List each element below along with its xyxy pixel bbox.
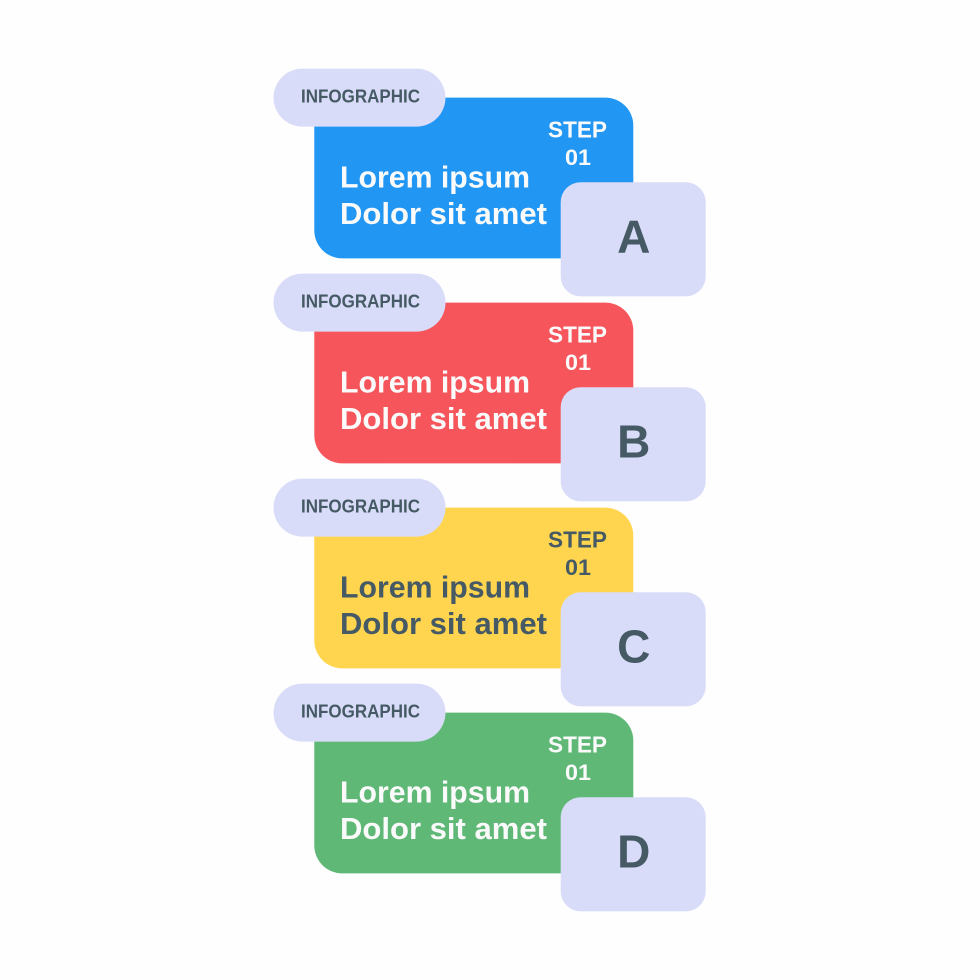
body text: Lorem ipsum: [340, 160, 530, 194]
body text: [340, 364, 547, 436]
card: yellow: [314, 508, 633, 668]
letter tile B: B: [617, 416, 650, 468]
tab: infographic label: INFOGRAPHIC: [301, 291, 420, 311]
panel: step C: [274, 479, 706, 706]
tab: infographic label: [274, 479, 446, 537]
body text: Lorem ipsum: [340, 570, 530, 604]
letter tile D: D: [617, 826, 650, 878]
step number: [548, 731, 607, 785]
step number: [548, 526, 607, 580]
panel: step A: [274, 69, 706, 296]
body text: [340, 570, 547, 641]
step number: STEP: [548, 731, 607, 757]
letter tile B: [561, 387, 706, 501]
card: green: [314, 713, 633, 873]
letter tile C: C: [617, 621, 650, 673]
letter tile A: A: [617, 211, 650, 263]
body text: [340, 774, 547, 846]
card: red: [314, 303, 633, 463]
step number: STEP: [548, 526, 607, 552]
tab: infographic label: INFOGRAPHIC: [301, 701, 420, 721]
letter tile D: [561, 797, 706, 911]
letter tile C: [561, 592, 706, 706]
body text: Dolor sit amet: [340, 606, 547, 641]
letter tile A: [561, 182, 706, 296]
tab: infographic label: [274, 684, 446, 742]
body text: [340, 160, 547, 231]
tab: infographic label: INFOGRAPHIC: [301, 496, 420, 516]
step number: 01: [565, 760, 591, 785]
step number: 01: [565, 145, 591, 170]
panel: step B: [274, 274, 706, 501]
step number: [548, 321, 607, 375]
tab: infographic label: [274, 274, 446, 332]
body text: Dolor sit amet: [340, 196, 547, 231]
tab: infographic label: [274, 69, 446, 127]
body text: Dolor sit amet: [340, 401, 547, 436]
tab: infographic label: INFOGRAPHIC: [301, 86, 420, 106]
panel: step D: [274, 684, 706, 911]
card: blue: [314, 98, 633, 258]
step number: STEP: [548, 116, 607, 142]
body text: Lorem ipsum: [340, 364, 530, 400]
step number: 01: [565, 350, 591, 375]
step number: [548, 116, 607, 170]
body text: Dolor sit amet: [340, 811, 547, 846]
step number: STEP: [548, 321, 607, 347]
step number: 01: [565, 555, 591, 580]
body text: Lorem ipsum: [340, 774, 530, 810]
